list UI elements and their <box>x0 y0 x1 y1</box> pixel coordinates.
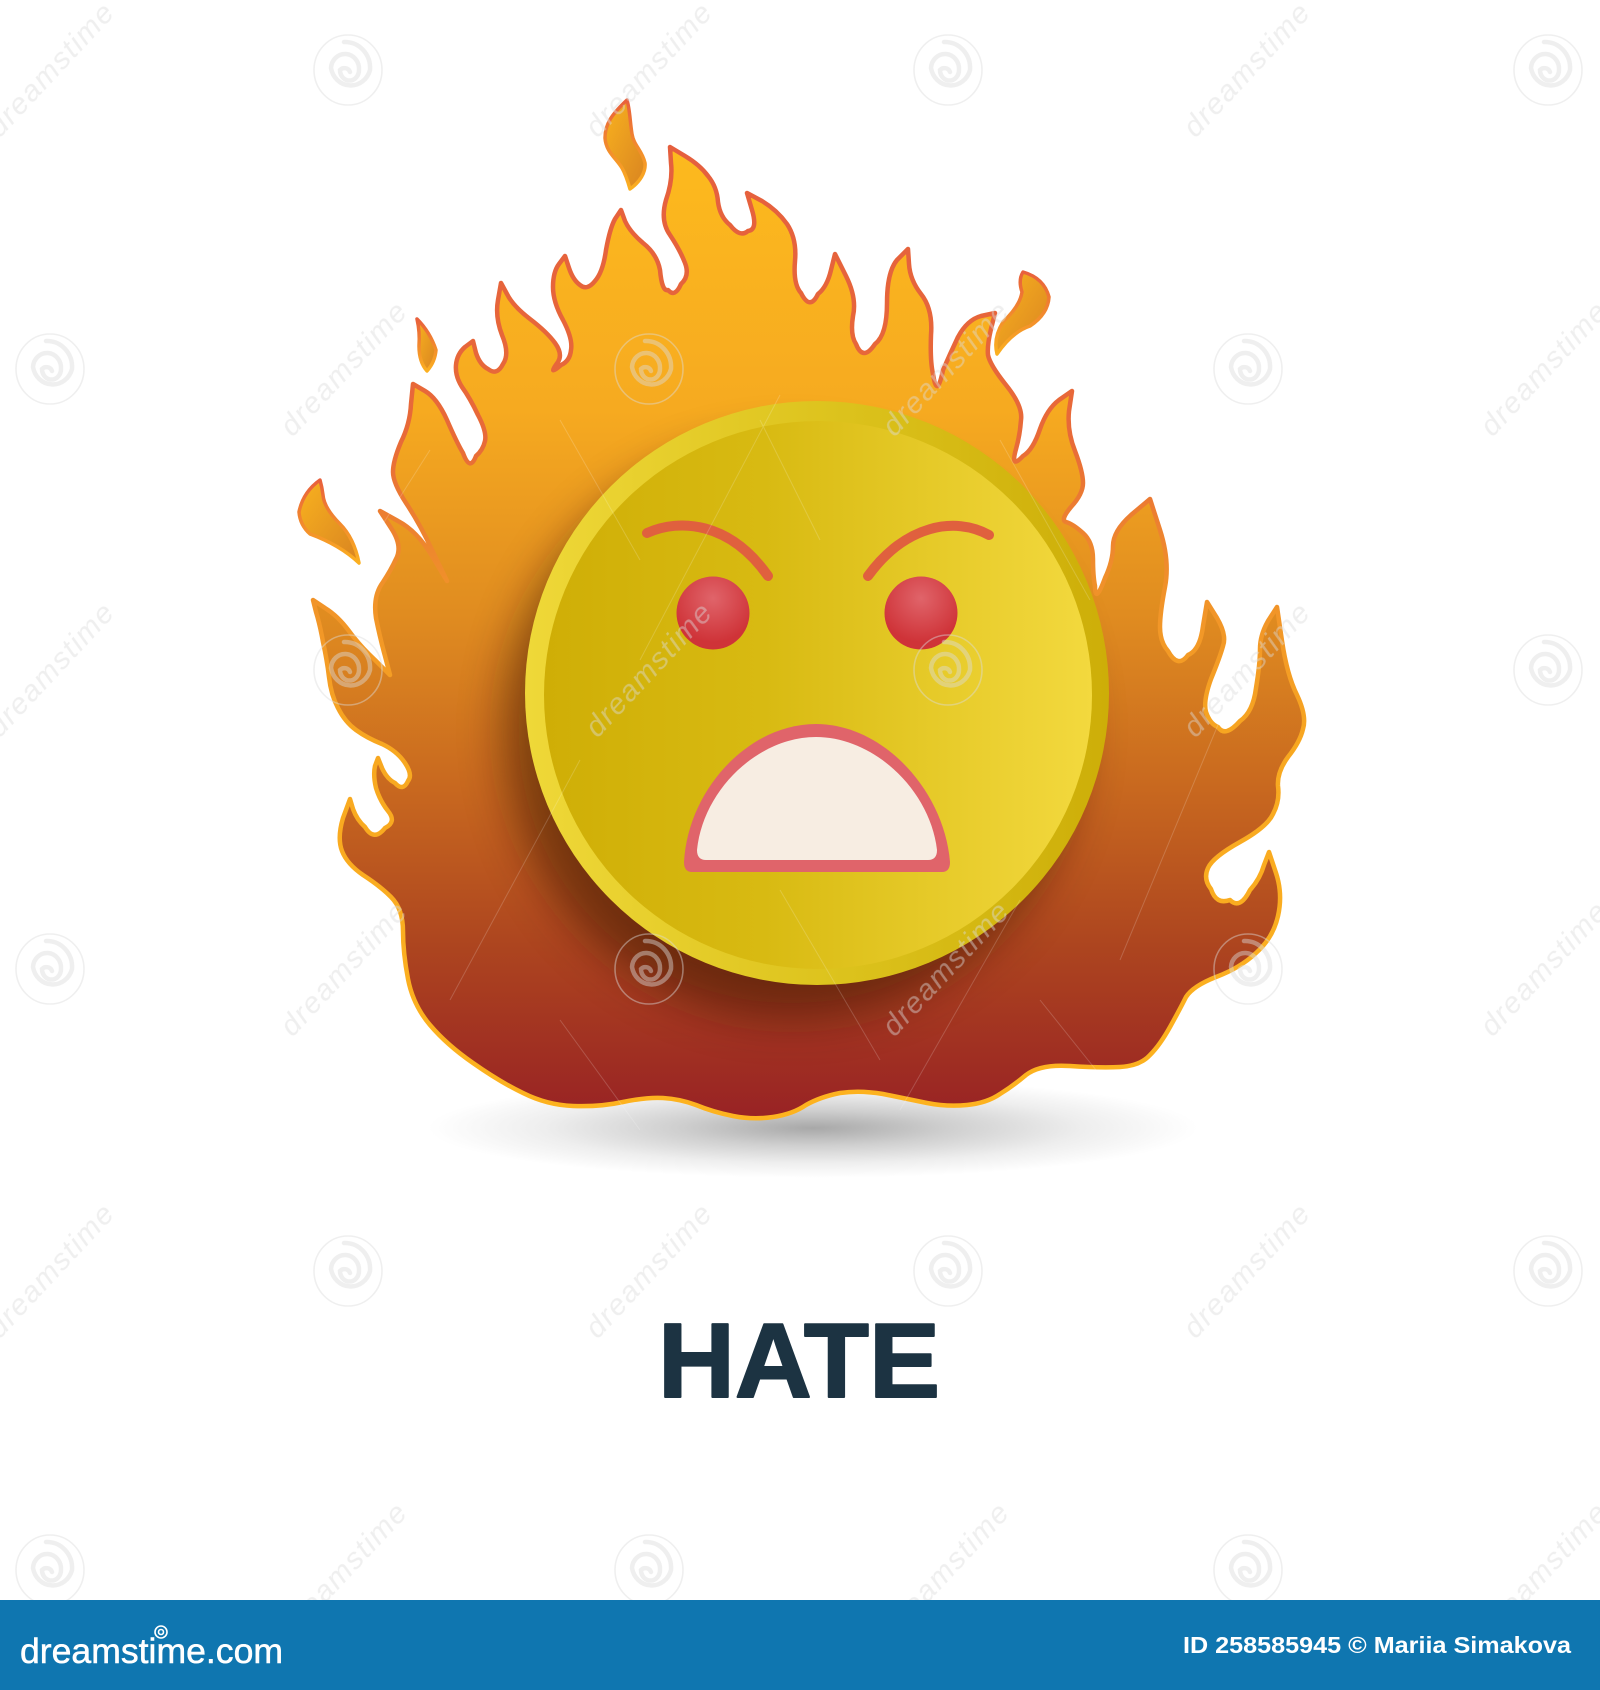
left eye <box>676 576 750 650</box>
image credit: ID 258585945 © Mariia Simakova <box>1183 1632 1571 1658</box>
watermark text: dreamstime <box>273 894 415 1043</box>
flame body <box>313 147 1304 1118</box>
footer logo text: dreamstime.com <box>20 1632 283 1671</box>
face rim <box>525 401 1109 985</box>
title: HATE <box>658 1302 940 1420</box>
mouth outline <box>684 724 950 872</box>
watermark text: dreamstime <box>273 294 415 443</box>
left eyebrow <box>647 525 768 576</box>
watermark text: dreamstime <box>875 294 1017 443</box>
right eyebrow <box>868 526 989 576</box>
spark: left <box>299 480 359 563</box>
spark: upper right <box>996 272 1049 354</box>
watermark text: dreamstime <box>578 595 720 744</box>
watermark text: dreamstime <box>1176 595 1318 744</box>
right eye <box>884 576 958 650</box>
spark: top <box>605 100 645 189</box>
watermark text: dreamstime <box>1176 1196 1318 1345</box>
mouth interior <box>697 737 937 860</box>
spark: upper left <box>417 319 436 371</box>
watermark text: dreamstime <box>875 1495 1017 1644</box>
footer logo swirl <box>155 1626 167 1638</box>
watermark text: dreamstime <box>875 894 1017 1043</box>
watermark text: dreamstime <box>273 1495 415 1644</box>
face drop shadow <box>504 442 1080 1018</box>
footer bar <box>0 1600 1600 1690</box>
watermark crosses <box>360 395 1220 1130</box>
face disc <box>544 421 1092 969</box>
emoji face <box>525 401 1109 985</box>
watermark text: dreamstime <box>578 1196 720 1345</box>
ground shadow <box>428 1078 1198 1178</box>
